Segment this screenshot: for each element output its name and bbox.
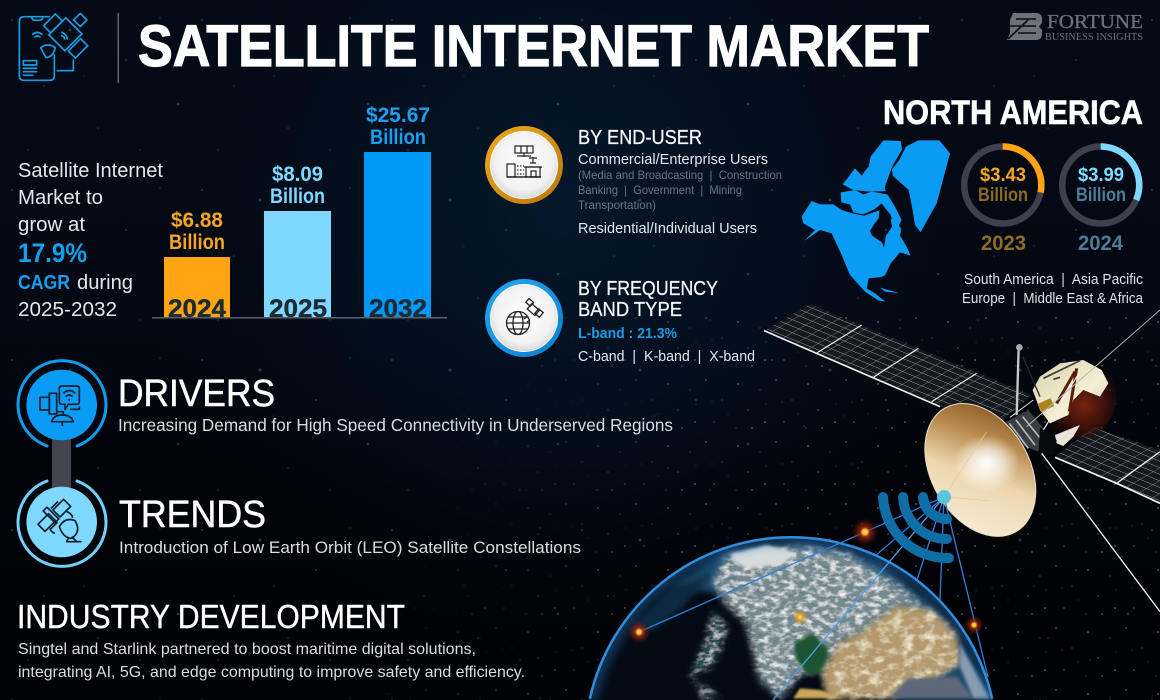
panel: trends [119, 494, 581, 557]
bar: 2025: 2025 [269, 295, 327, 323]
bar: 2032 [364, 104, 431, 323]
panel: by frequency band type [578, 278, 755, 365]
icon: wifi signal arcs [883, 497, 949, 558]
bar: 2024: 2024 [168, 295, 226, 323]
CAGR text block: grow at [18, 213, 85, 236]
bar chart [152, 104, 447, 323]
CAGR text block: 17.9% [18, 238, 87, 268]
panel: industry development: integrating AI, 5G, and edge computing to improve safety and efficiency. [18, 664, 525, 681]
logo icon: satellite and phone [19, 13, 88, 80]
panel: industry development: Singtel and Starlink partnered to boost maritime digital solutions, [18, 641, 476, 658]
desert land [822, 605, 961, 698]
panel: by frequency band type: C-band | K-band | X-band [578, 348, 755, 365]
panel: by end-user: Commercial/Enterprise Users [578, 151, 768, 168]
panel: drivers: Increasing Demand for High Speed Connectivity in Underserved Regions [118, 415, 673, 435]
satellite body [1003, 353, 1117, 455]
donut: 2024: Billion [1076, 185, 1126, 206]
panel: by frequency band type: BAND TYPE [578, 299, 682, 321]
CAGR text block [18, 159, 163, 321]
earth illustration [590, 537, 993, 700]
panel: by end-user: Banking | Government | Mining [578, 183, 742, 197]
title: SATELLITE INTERNET MARKET [138, 14, 929, 79]
icon: trends [18, 481, 106, 566]
other regions list [962, 271, 1144, 307]
icon: end-user badge [485, 126, 563, 204]
panel: by end-user [578, 127, 782, 237]
panel: by frequency band type: BY FREQUENCY [578, 278, 718, 300]
bar: 2024: $6.88 [171, 209, 223, 232]
CAGR text block: 2025-2032 [18, 298, 117, 321]
polar cap [730, 545, 798, 568]
CAGR text block: Satellite Internet [18, 159, 163, 182]
bar: 2032: $25.67 [366, 104, 430, 127]
other regions list: Europe | Middle East & Africa [962, 290, 1144, 307]
panel: industry development: INDUSTRY DEVELOPMENT [17, 598, 405, 635]
satellite illustration [764, 304, 1160, 612]
brand logo: FORTUNE [1047, 11, 1143, 33]
forest [793, 633, 828, 674]
bar: 2025: Billion [270, 185, 325, 208]
brand logo: BUSINESS INSIGHTS [1045, 32, 1143, 43]
antennas and booms [1016, 310, 1160, 612]
signal node [937, 490, 951, 504]
panel: by end-user: BY END-USER [578, 127, 702, 149]
panel: by end-user: Transportation) [578, 198, 656, 212]
panel: trends: TRENDS [119, 494, 266, 536]
donut: 2023: 2023 [981, 232, 1026, 255]
CAGR text block: Market to [18, 186, 103, 209]
donut: 2024: $3.99 [1078, 165, 1124, 186]
dish [901, 382, 1060, 558]
donut: 2024 [1062, 146, 1139, 255]
donut: 2023: $3.43 [980, 165, 1026, 186]
other regions list: South America | Asia Pacific [964, 271, 1143, 288]
brand logo [1007, 11, 1143, 43]
panel: by end-user: (Media and Broadcasting | Construction [578, 168, 782, 182]
icon: frequency band badge [485, 279, 563, 357]
bar: 2032: Billion [370, 126, 426, 149]
solar panel: left [764, 304, 1032, 420]
donut: 2023 [964, 146, 1041, 255]
southern ocean [890, 677, 973, 698]
icon: drivers [18, 361, 106, 446]
panel: by end-user: Residential/Individual Users [578, 220, 757, 237]
mainland [802, 201, 911, 302]
bar: 2025: $8.09 [272, 163, 323, 186]
greenland [892, 140, 950, 232]
CAGR text block: CAGR [18, 271, 70, 294]
panel: trends: Introduction of Low Earth Orbit (LEO) Satellite Constellations [119, 538, 581, 557]
panel: drivers: DRIVERS [118, 373, 275, 415]
header divider [118, 13, 119, 83]
glowing ground stations [627, 518, 984, 644]
donut: 2024: 2024 [1078, 232, 1123, 255]
bar: 2032: 2032 [369, 295, 427, 323]
panel: drivers [118, 373, 673, 435]
panel: industry development [17, 598, 525, 681]
bar: 2024: Billion [169, 231, 225, 254]
arctic islands [868, 140, 902, 188]
cloud land [690, 547, 923, 698]
map: north america [802, 140, 950, 302]
signal beams [639, 497, 988, 700]
solar panel: right [1055, 427, 1160, 503]
connector: drivers to trends [52, 438, 71, 488]
panel: by frequency band type: L-band : 21.3% [578, 326, 677, 342]
CAGR text block: during [77, 271, 133, 294]
ocean tones [673, 543, 993, 700]
donut: 2023: Billion [978, 185, 1028, 206]
bar: 2025 [264, 163, 331, 323]
bar: 2024 [164, 209, 230, 323]
